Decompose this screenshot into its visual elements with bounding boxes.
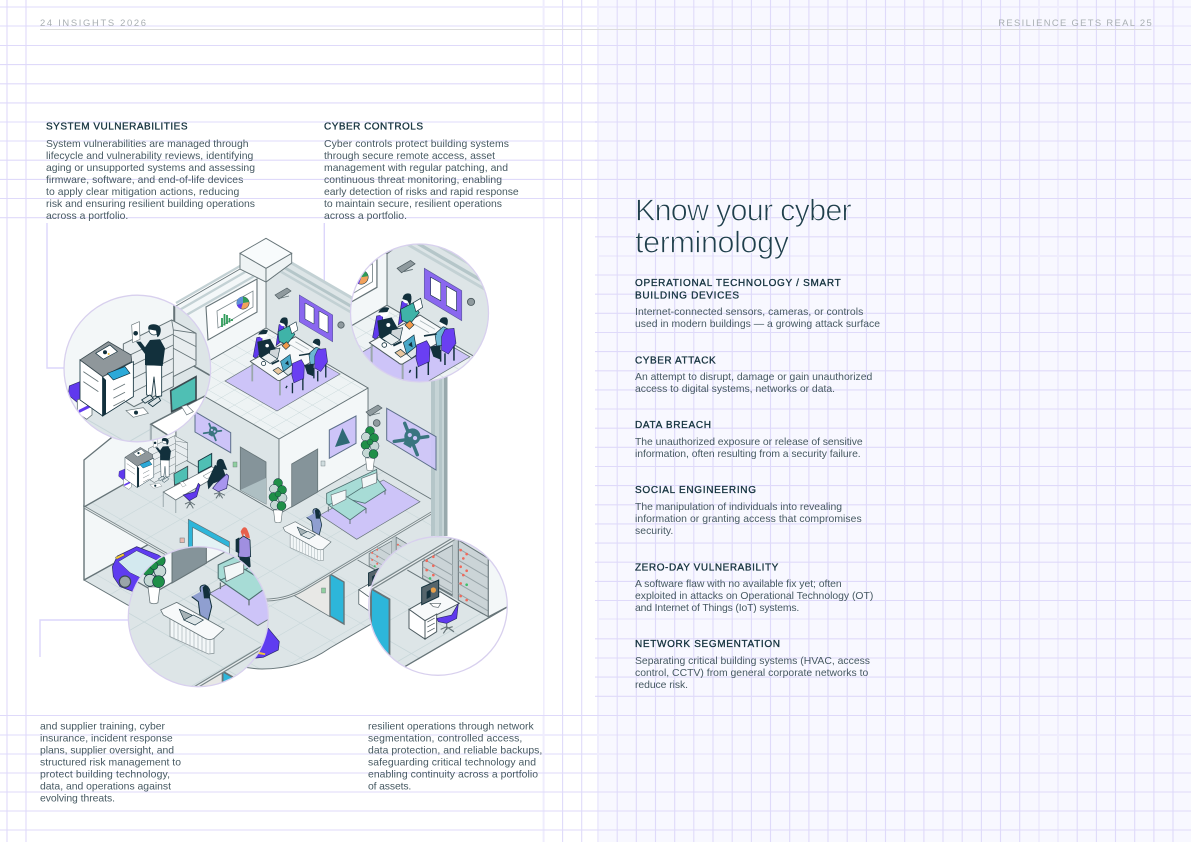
text block: cyber controls: CYBER CONTROLS — [324, 121, 423, 132]
text block: system vulnerabilities — [46, 121, 255, 222]
term: cyber attack: An attempt to disrupt, damage or gain unauthorized — [635, 372, 873, 383]
circle inset: copier area — [63, 294, 212, 442]
text block: system vulnerabilities: risk and ensuring resilient building operations — [46, 199, 255, 210]
text block: system vulnerabilities: System vulnerabilities are managed through — [46, 139, 249, 150]
text block: supplier risk continuation: protect building technology, — [40, 770, 170, 780]
HVAC box on roof — [240, 238, 292, 282]
switches — [233, 461, 325, 467]
ground floor wall and cyan door — [293, 574, 344, 624]
circle inset: reception — [128, 546, 269, 688]
car: left — [112, 547, 168, 592]
sensor: upper — [338, 322, 344, 328]
term: zero-day vulnerability: exploited in attacks on Operational Technology (OT) — [635, 591, 873, 602]
header: right folio: RESILIENCE GETS REAL 25 — [998, 17, 1152, 28]
text block: system vulnerabilities: to apply clear mitigation actions, reducing — [46, 187, 240, 198]
text block: resilient operations continuation: data protection, and reliable backups, — [368, 746, 542, 756]
service column — [431, 370, 448, 536]
term: social engineering: information or granting access that compromises — [635, 514, 862, 525]
circle inset: server room — [368, 536, 508, 676]
door: right face — [292, 449, 318, 507]
callout line: supplier risk — [40, 620, 128, 657]
header: left folio: 24 INSIGHTS 2026 — [40, 17, 146, 28]
text block: cyber controls: management with regular patching, and — [324, 163, 508, 174]
block left face — [176, 380, 279, 514]
term: social engineering — [635, 485, 862, 537]
ducts: left — [176, 262, 256, 321]
term: cyber attack — [635, 355, 873, 395]
purple wall panel with notes — [299, 295, 333, 342]
callout line: system vulnerabilities — [47, 223, 64, 368]
left office back wall — [84, 400, 176, 507]
rug: lobby — [320, 480, 420, 539]
meeting table with four colleagues — [250, 317, 328, 395]
text block: resilient operations continuation — [368, 722, 542, 792]
term: network segmentation — [635, 639, 870, 691]
term: operational technology: Internet-connected sensors, cameras, or controls — [635, 307, 863, 318]
title — [635, 194, 852, 260]
text block: supplier risk continuation: and supplier training, cyber — [40, 722, 166, 732]
term: operational technology: BUILDING DEVICES — [635, 290, 739, 301]
panel: small skull warning — [195, 412, 231, 453]
security camera: upper — [275, 288, 291, 299]
panel: large skull warning — [387, 408, 436, 470]
term: network segmentation: reduce risk. — [635, 680, 688, 691]
term: zero-day vulnerability — [635, 562, 873, 614]
panel: warning triangle — [329, 416, 356, 458]
white illustration area — [26, 218, 543, 715]
text block: resilient operations continuation: segmentation, controlled access, — [368, 734, 522, 744]
term: zero-day vulnerability: ZERO-DAY VULNERABILITY — [635, 562, 779, 573]
term: social engineering: The manipulation of individuals into revealing — [635, 502, 842, 513]
text block: resilient operations continuation: resilient operations through network — [368, 722, 534, 732]
roof terrace floor — [176, 328, 368, 439]
text block: system vulnerabilities: firmware, software, and end-of-life devices — [46, 175, 243, 186]
large right wall — [266, 263, 447, 506]
text block: cyber controls: early detection of risks and rapid response — [324, 187, 519, 198]
term: cyber attack: CYBER ATTACK — [635, 355, 716, 366]
page background: right page — [597, 0, 1191, 842]
text block: resilient operations continuation: safeguarding critical technology and — [368, 758, 536, 768]
security camera: lower — [366, 405, 382, 416]
circle inset: meeting room — [350, 243, 490, 382]
text block: system vulnerabilities: aging or unsupported systems and assessing — [46, 163, 255, 174]
reception desk with receptionist — [283, 509, 331, 561]
glass doorway — [180, 519, 229, 567]
term: data breach: information, often resulting from a security failure. — [635, 449, 861, 460]
term: cyber attack: access to digital systems, networks or data. — [635, 384, 835, 395]
term: zero-day vulnerability: and Internet of Things (IoT) systems. — [635, 603, 799, 614]
term: operational technology — [635, 278, 880, 330]
desk area in lower office — [163, 454, 222, 513]
text block: supplier risk continuation — [40, 722, 181, 804]
term: zero-day vulnerability: A software flaw with no available fix yet; often — [635, 579, 842, 590]
standing woman with red hair — [236, 527, 251, 569]
text block: cyber controls — [324, 121, 519, 222]
server room — [358, 535, 433, 612]
text block: cyber controls: Cyber controls protect building systems — [324, 139, 509, 150]
term: network segmentation: Separating critical building systems (HVAC, access — [635, 656, 870, 667]
text block: resilient operations continuation: of assets. — [368, 782, 411, 792]
mid floor slab — [84, 454, 443, 600]
term: social engineering: security. — [635, 526, 673, 537]
text block: cyber controls: to maintain secure, resilient operations — [324, 199, 502, 210]
term: operational technology: OPERATIONAL TECHNOLOGY / SMART — [635, 278, 841, 289]
copier, cabinets and employee — [119, 436, 188, 489]
block right face — [279, 388, 368, 514]
seated worker and chairs — [183, 459, 229, 508]
term: data breach: DATA BREACH — [635, 420, 711, 431]
text block: cyber controls: through secure remote access, asset — [324, 151, 495, 162]
sensor: lower — [373, 420, 380, 426]
term: operational technology: used in modern buildings — a growing attack surface — [635, 319, 880, 330]
term: network segmentation: control, CCTV) from general corporate networks to — [635, 668, 869, 679]
isometric building illustration — [84, 238, 448, 669]
car: right — [230, 628, 279, 663]
ground floor left wall — [84, 505, 180, 580]
text block: cyber controls: across a portfolio. — [324, 211, 407, 222]
upper left wall — [176, 269, 266, 380]
text block: supplier risk continuation: plans, supplier oversight, and — [40, 746, 174, 756]
header rule — [40, 29, 1152, 30]
ground floor — [84, 470, 433, 669]
title: terminology — [635, 226, 790, 260]
plant: lobby left — [269, 478, 287, 523]
title: Know your cyber — [635, 194, 852, 228]
whiteboard with charts — [206, 279, 257, 340]
rug: terrace — [225, 344, 340, 411]
ducts: right — [278, 258, 447, 368]
page background: left page — [0, 0, 598, 842]
callout line: cyber controls — [324, 223, 351, 313]
text block: resilient operations continuation: enabling continuity across a portfolio — [368, 770, 538, 780]
text block: supplier risk continuation: insurance, incident response — [40, 734, 173, 744]
term: data breach — [635, 420, 863, 460]
term: network segmentation: NETWORK SEGMENTATION — [635, 639, 780, 650]
sofa — [327, 469, 386, 524]
text block: supplier risk continuation: evolving threats. — [40, 794, 115, 804]
text block: system vulnerabilities: lifecycle and vulnerability reviews, identifying — [46, 151, 254, 162]
text block: system vulnerabilities: across a portfolio. — [46, 211, 128, 222]
text block: cyber controls: continuous threat monitoring, enabling — [324, 175, 502, 186]
text block: supplier risk continuation: structured risk management to — [40, 758, 181, 768]
door: left face — [240, 447, 266, 504]
term: social engineering: SOCIAL ENGINEERING — [635, 485, 756, 496]
text block: system vulnerabilities: SYSTEM VULNERABILITIES — [46, 121, 188, 132]
text block: supplier risk continuation: data, and operations against — [40, 782, 171, 792]
plant: lobby right — [361, 426, 379, 471]
term: data breach: The unauthorized exposure or release of sensitive — [635, 437, 863, 448]
